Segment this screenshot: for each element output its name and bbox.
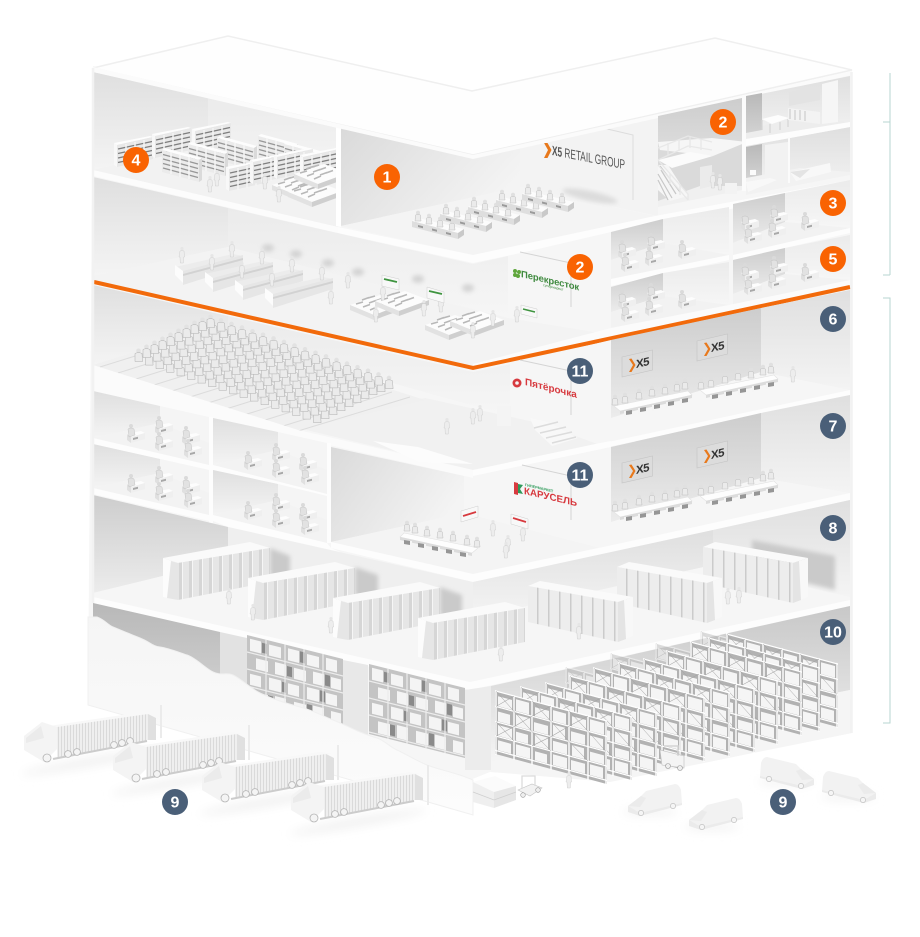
trucks xyxy=(24,712,423,822)
logo: Karusel: ГИПЕРМАРКЕТ xyxy=(525,483,554,494)
bed xyxy=(790,163,831,181)
X5 signs xyxy=(622,334,728,377)
doorway xyxy=(746,93,762,133)
van B xyxy=(689,798,743,830)
badge 9 right xyxy=(770,789,796,815)
badge 3: 3 xyxy=(829,196,838,212)
panel: stairs room (2) xyxy=(658,97,747,207)
panel: bedroom and lounge rooms xyxy=(746,122,850,195)
truck 1 xyxy=(24,712,156,762)
wall shadows xyxy=(262,244,474,292)
promo stands xyxy=(461,506,528,529)
badge 1: 1 xyxy=(383,170,392,186)
X5 signs xyxy=(622,441,728,483)
audience xyxy=(135,314,393,423)
checkout groups xyxy=(328,272,520,340)
server cabinets left xyxy=(163,542,525,660)
store shelves xyxy=(114,122,324,191)
badge 1 xyxy=(374,164,400,190)
building base xyxy=(88,66,852,780)
meeting table xyxy=(400,520,526,559)
shoppers xyxy=(207,170,282,202)
logo: Pyaterochka: Пятёрочка xyxy=(525,377,577,401)
badge 10: 10 xyxy=(824,624,842,642)
badge 4 xyxy=(123,147,149,173)
badge 3 xyxy=(820,190,846,216)
dining table xyxy=(762,115,789,133)
badge 7: 7 xyxy=(829,418,838,436)
fridge xyxy=(822,80,838,124)
loading dock wavy wall xyxy=(88,617,473,815)
meeting tables xyxy=(612,469,778,523)
wall racks xyxy=(247,635,465,758)
panel: roof xyxy=(93,36,852,159)
pallet racks xyxy=(495,633,838,785)
badge 4: 4 xyxy=(132,152,141,170)
van D xyxy=(822,771,876,803)
logo: Perekrestok: супермаркет xyxy=(543,283,564,292)
truck 3 xyxy=(202,752,334,802)
panel: auditorium with Pyaterochka xyxy=(93,285,611,478)
raked seating xyxy=(93,330,425,431)
checkout counters xyxy=(272,148,348,207)
side edges xyxy=(93,68,852,733)
furniture near stairs xyxy=(700,165,737,194)
divider: orange line xyxy=(94,282,850,368)
staff xyxy=(226,587,742,661)
panel: conference hall (7) xyxy=(608,395,850,553)
badge 2 upper xyxy=(710,109,736,135)
sofa and lamp xyxy=(746,170,777,192)
desks xyxy=(618,233,696,322)
badge 9 left: 9 xyxy=(171,794,180,812)
badge 11 lower xyxy=(567,462,593,488)
logo: Perekrestok: Перекресток xyxy=(521,269,579,293)
cabinet shadows xyxy=(270,540,835,622)
pallet racks back row xyxy=(565,630,812,761)
vans xyxy=(628,757,876,830)
dock partitions xyxy=(161,705,428,805)
badge 11 upper xyxy=(567,358,593,384)
truck 2 xyxy=(113,732,245,782)
badge 6: 6 xyxy=(829,312,838,328)
panel: conference hall (6) xyxy=(608,290,850,447)
panel: offices left column (row 2) xyxy=(611,207,729,328)
badge 8: 8 xyxy=(829,520,838,538)
right bracket: top floors xyxy=(883,73,890,275)
panel: offices right column (3) xyxy=(733,180,850,260)
badge 8 xyxy=(820,515,846,541)
badge 5 xyxy=(820,246,846,272)
panel: floor with server cabinets (8) xyxy=(93,495,850,690)
sofas xyxy=(175,241,333,308)
logo: Karusel: КАРУСЕЛЬ xyxy=(524,486,577,509)
panel: offices right column (5) xyxy=(733,235,850,305)
badge 2 lower: 2 xyxy=(576,260,585,276)
panel: office hall with X5 Retail Group sign (1) xyxy=(336,116,850,263)
right bracket: lower floors xyxy=(883,298,890,723)
logo: X5 Retail Group xyxy=(544,143,625,172)
panel: kitchen room xyxy=(746,76,850,139)
badge 6 xyxy=(820,306,846,332)
panel: offices lower left xyxy=(93,391,331,543)
badge 11 lower: 11 xyxy=(572,468,589,484)
partition xyxy=(788,137,790,183)
desks xyxy=(127,416,319,535)
logo: X5 Retail Group: X5 RETAIL GROUP xyxy=(552,143,625,172)
van A xyxy=(628,784,682,816)
desk rows xyxy=(412,184,574,239)
badge 9 right: 9 xyxy=(779,794,788,812)
staircase xyxy=(658,136,713,201)
badge 2 upper: 2 xyxy=(719,114,728,132)
badge 11 upper: 11 xyxy=(572,364,589,380)
badge 7 xyxy=(820,413,846,439)
badge 9 left xyxy=(162,789,188,815)
stage xyxy=(373,405,578,464)
pallet stack and forklift xyxy=(473,772,572,808)
kitchen unit xyxy=(788,86,820,124)
server cabinets right xyxy=(528,542,808,642)
van C xyxy=(760,757,814,789)
badge 2 lower xyxy=(567,254,593,280)
panel: floor with product shelves (4) xyxy=(93,72,348,233)
panel: Karusel hall xyxy=(213,447,611,582)
ground shadows xyxy=(20,746,876,838)
promo stands xyxy=(382,275,537,318)
truck 4 xyxy=(291,772,423,822)
door panel xyxy=(765,142,788,187)
badge 10 xyxy=(820,619,846,645)
meeting tables xyxy=(612,363,796,417)
panel: Perekrestok sales floor (2) xyxy=(93,177,850,368)
panel: warehouse (10) xyxy=(93,603,852,785)
badge 5: 5 xyxy=(829,252,838,268)
forklift inside xyxy=(660,746,684,770)
